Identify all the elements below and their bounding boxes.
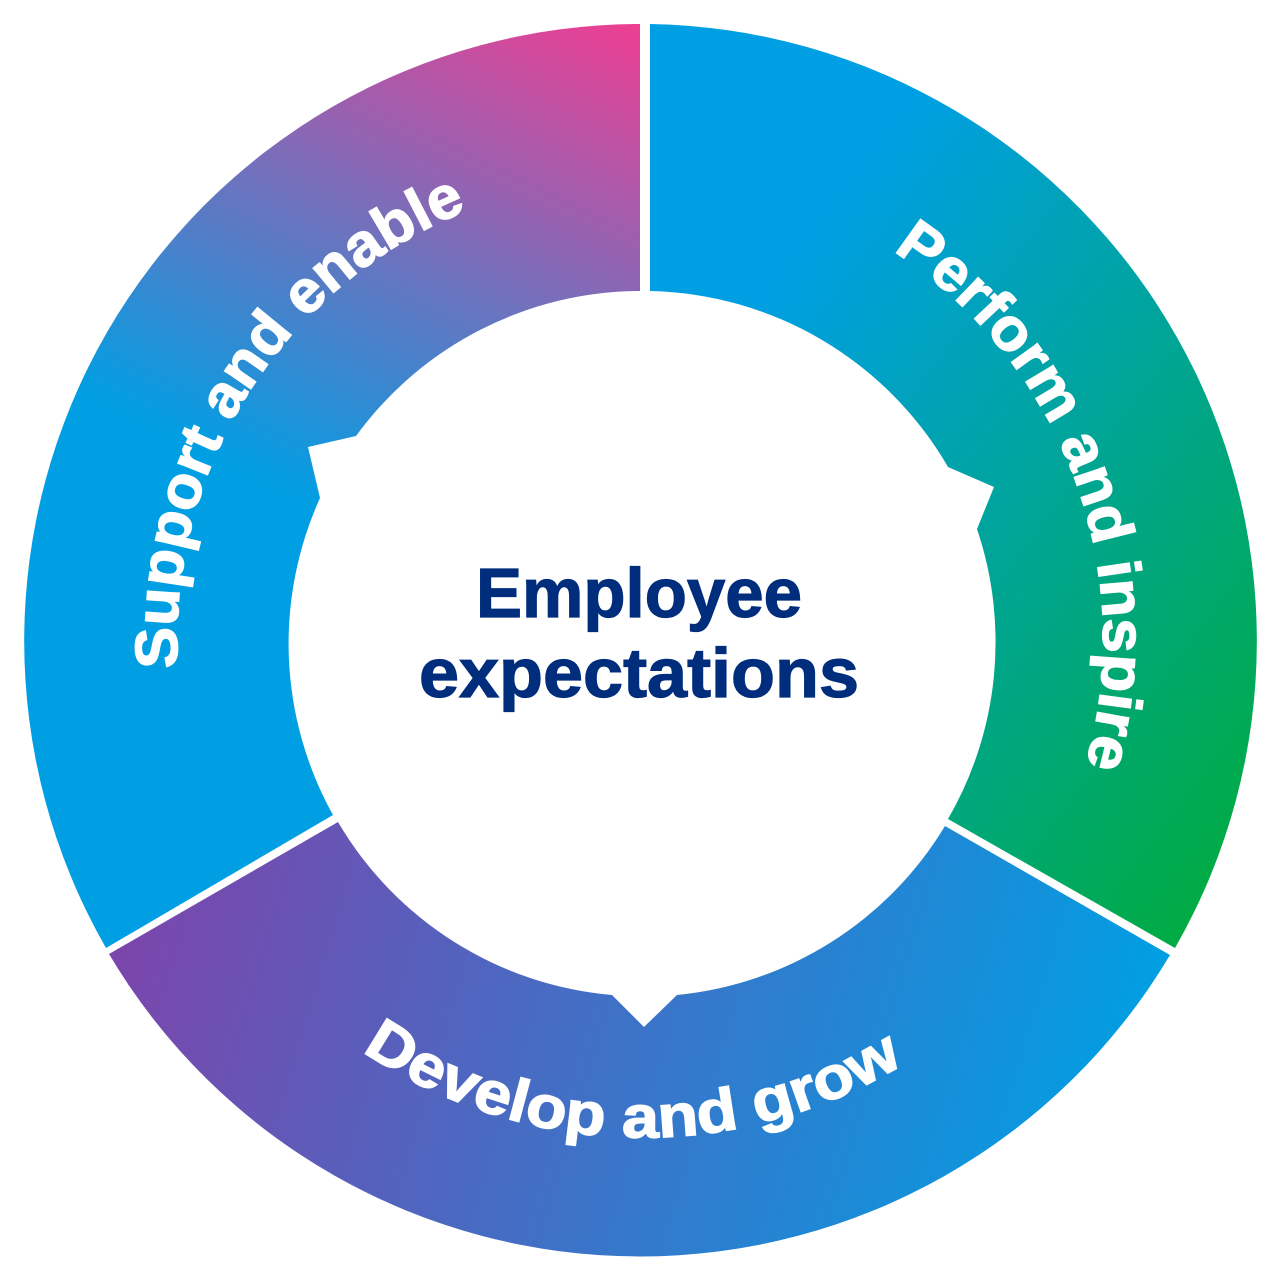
label: Perform and inspire: Perform and inspire	[896, 218, 1144, 769]
segment: develop and grow	[109, 822, 1170, 1256]
center title	[419, 554, 859, 712]
label: Support and enable: Support and enable	[134, 185, 462, 668]
label: Develop and grow: Develop and grow	[364, 1018, 898, 1146]
center title: Employee	[476, 554, 802, 632]
center title: expectations	[419, 634, 859, 712]
